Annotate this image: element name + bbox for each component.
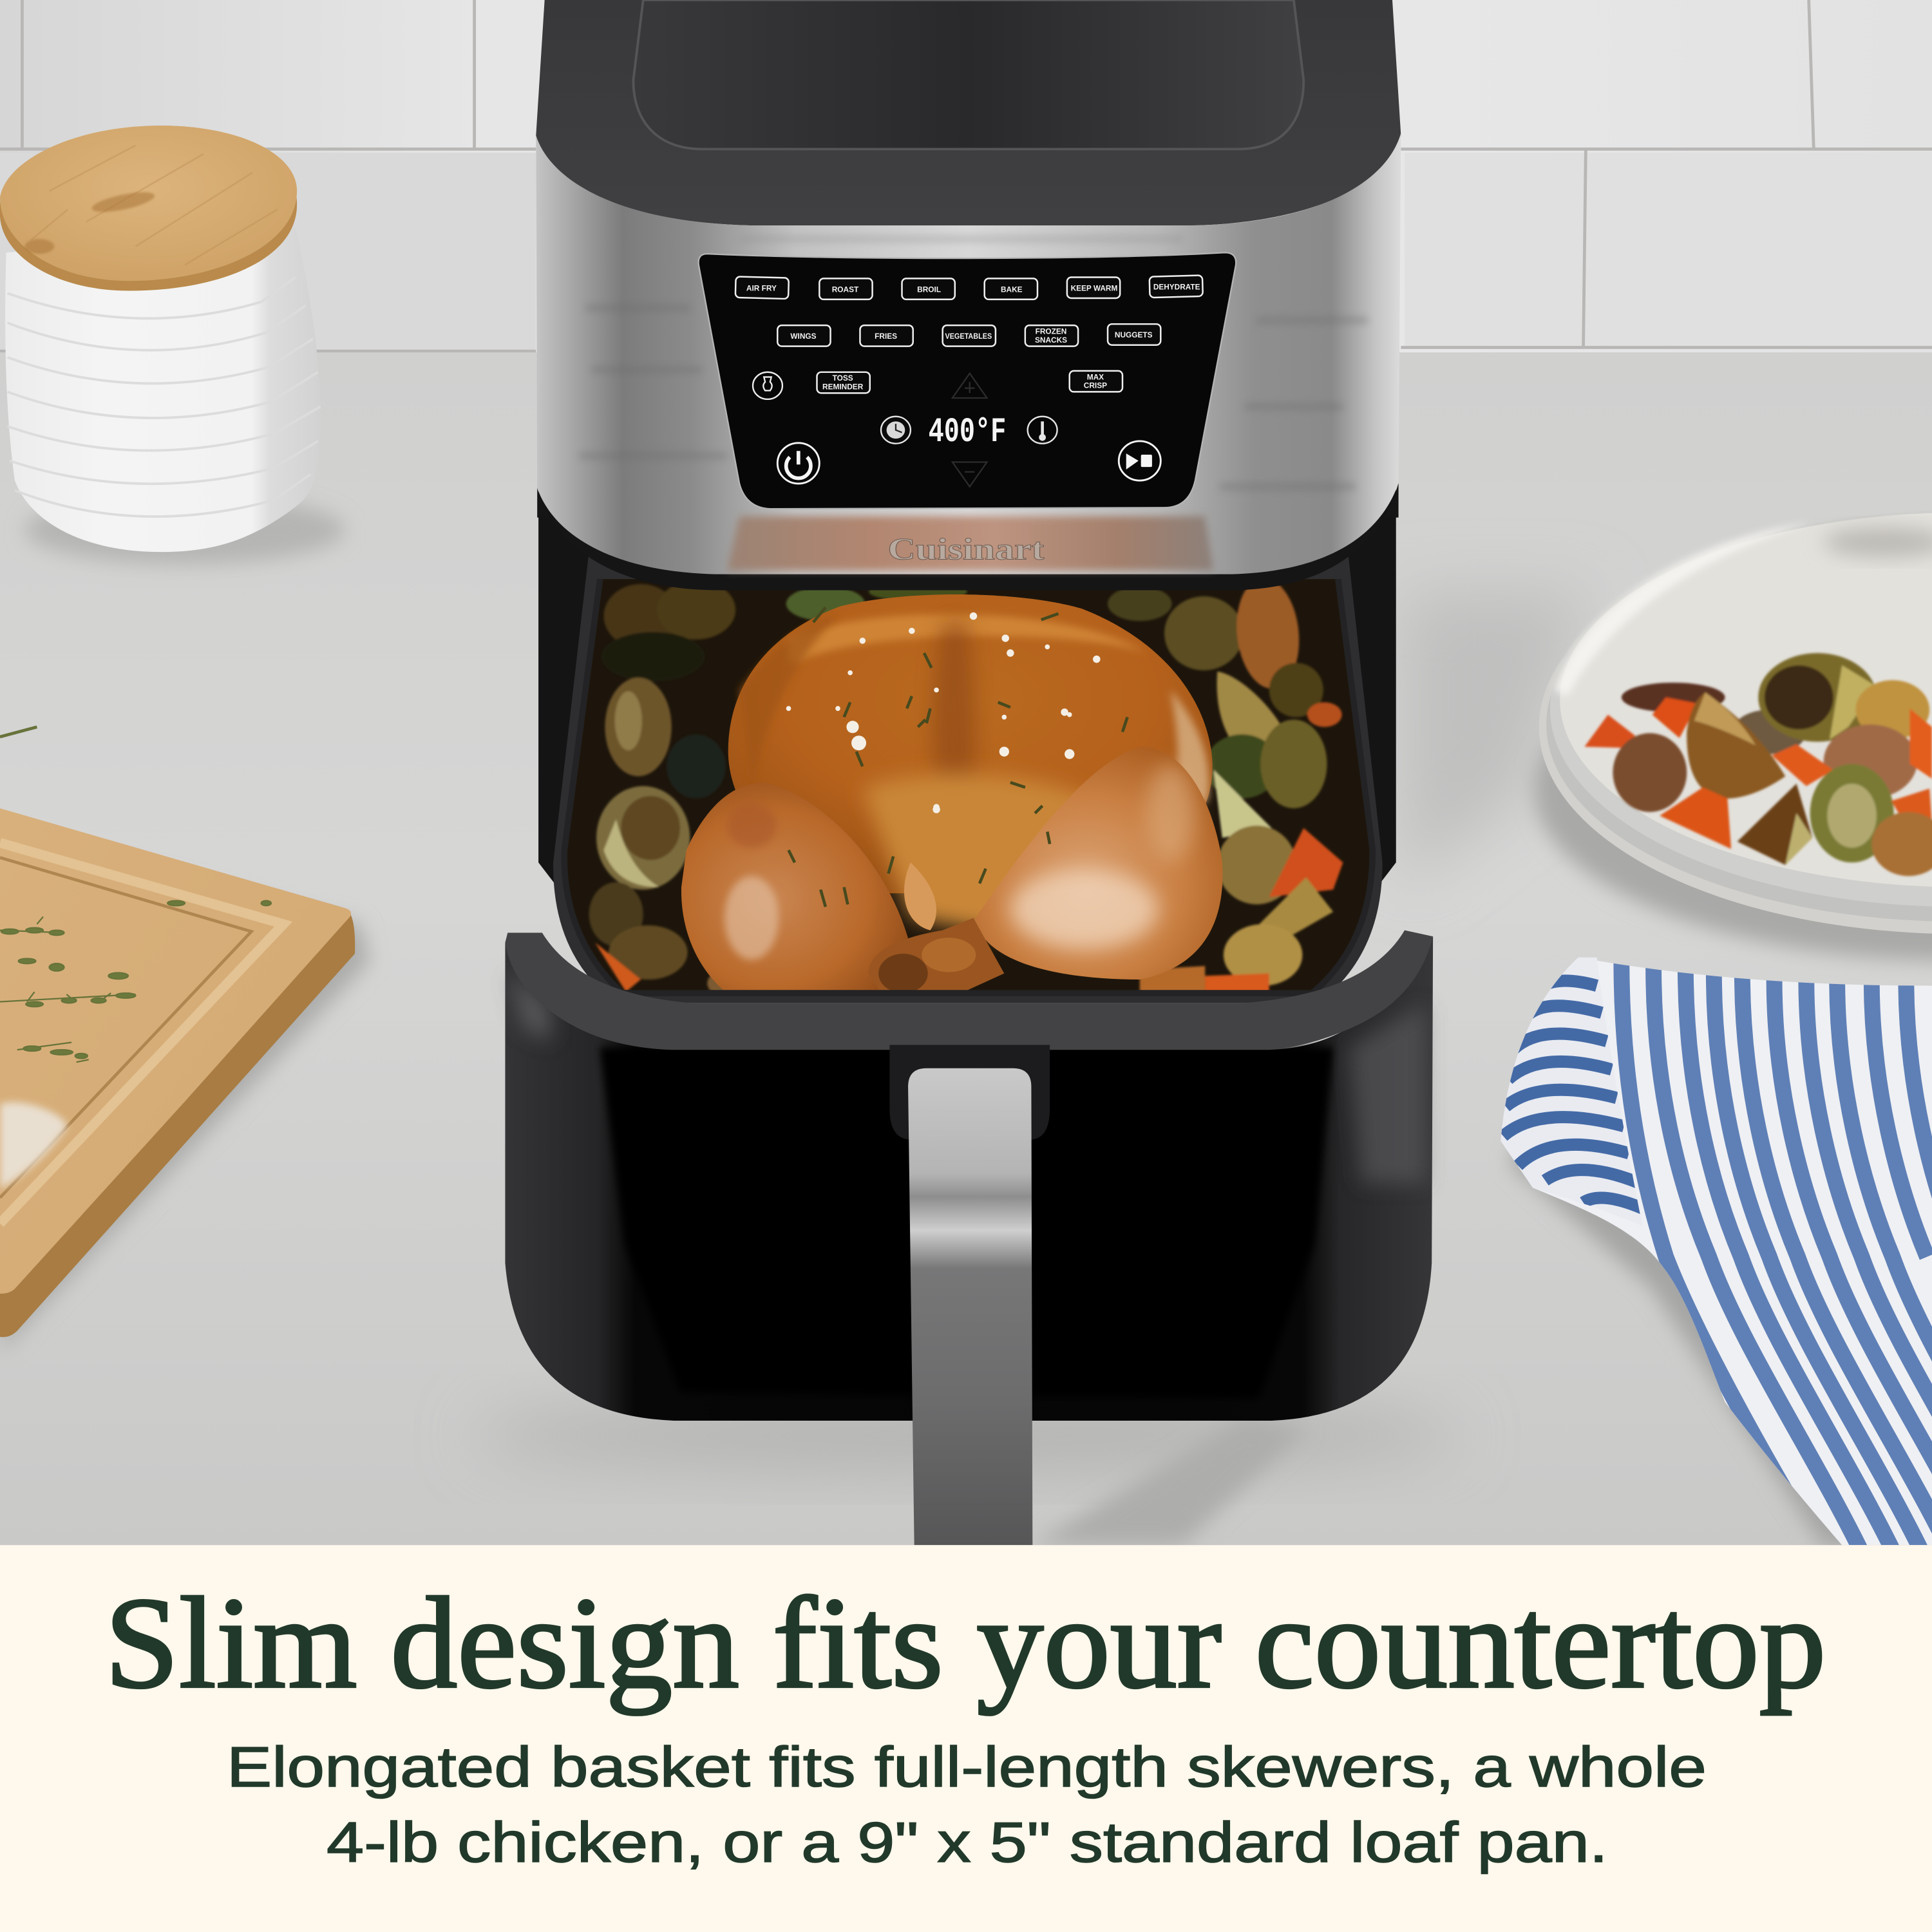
icon: start stop button: [1119, 441, 1160, 480]
mode buttons: CRISP: [1084, 381, 1107, 390]
mode buttons: SNACKS: [1035, 336, 1067, 345]
mode buttons: BROIL: [917, 285, 941, 294]
icon: clock: [881, 417, 911, 444]
brand logo: Cuisinart: [888, 533, 1045, 567]
drumstick ends: [869, 918, 1004, 993]
wood knots: [24, 188, 156, 254]
mode buttons: NUGGETS: [1115, 330, 1153, 339]
handle: [908, 1068, 1032, 1545]
thyme sprigs: [0, 727, 271, 1062]
handle mount: [889, 1045, 1050, 1140]
control panel: [699, 252, 1236, 509]
subtitle: Elongated basket fits full-length skewers, a whole: [227, 1735, 1707, 1799]
subtitle: [227, 1735, 1707, 1874]
icon: light bulb: [753, 372, 782, 399]
roast chicken: [681, 594, 1223, 993]
lid: [536, 0, 1401, 225]
title: Slim design fits your countertop: [105, 1570, 1826, 1715]
left thigh: [681, 783, 909, 993]
mode buttons: FROZEN: [1036, 327, 1066, 336]
mode buttons: AIR FRY: [746, 284, 777, 293]
towel fold: [1501, 957, 1640, 1215]
mode buttons: BAKE: [1001, 285, 1023, 294]
drawer front: [505, 931, 1433, 1545]
ceramic jar with wooden lid: [0, 126, 345, 564]
counter shadows: [475, 591, 1589, 1545]
temperature display: 400°F: [929, 413, 1006, 452]
stainless steel band: [536, 133, 1401, 574]
countertop: [0, 352, 1932, 1548]
mode buttons: DEHYDRATE: [1153, 283, 1200, 292]
subtitle: 4-lb chicken, or a 9" x 5" standard loaf pan.: [327, 1810, 1608, 1874]
mode buttons: VEGETABLES: [945, 332, 992, 341]
drawer glossy reflections: [509, 973, 1426, 1183]
vegetables around the chicken: [589, 575, 1343, 1001]
mode buttons: REMINDER: [822, 383, 864, 392]
drawer rim: [505, 931, 1433, 1050]
background wall with tiles: [0, 0, 1932, 357]
cutting board with thyme: [0, 727, 370, 1353]
air fryer side walls: [538, 480, 1396, 900]
icon: thermometer: [1028, 417, 1057, 444]
right thigh: [974, 746, 1223, 980]
brushed steel streaks: [579, 239, 1368, 487]
mode buttons: KEEP WARM: [1071, 284, 1117, 293]
basket interior with food: [553, 552, 1383, 1003]
black bezel under band: [537, 483, 1399, 590]
mode buttons: TOSS: [833, 374, 853, 383]
mode buttons: WINGS: [790, 332, 817, 341]
plates with roasted vegetables: [1534, 510, 1932, 961]
icon: plus button: [952, 374, 987, 398]
mode buttons: MAX: [1087, 372, 1104, 381]
copper reflection: [727, 516, 1214, 571]
striped kitchen towel: [1491, 949, 1932, 1555]
icon: minus button: [952, 462, 987, 487]
mode buttons: ROAST: [832, 285, 859, 294]
air fryer: [505, 0, 1433, 1545]
mode buttons: [735, 275, 1203, 393]
mode buttons: FRIES: [875, 332, 897, 341]
icon: power button: [777, 443, 819, 484]
salt pile: [0, 1103, 66, 1189]
caption band: [0, 1545, 1932, 1932]
